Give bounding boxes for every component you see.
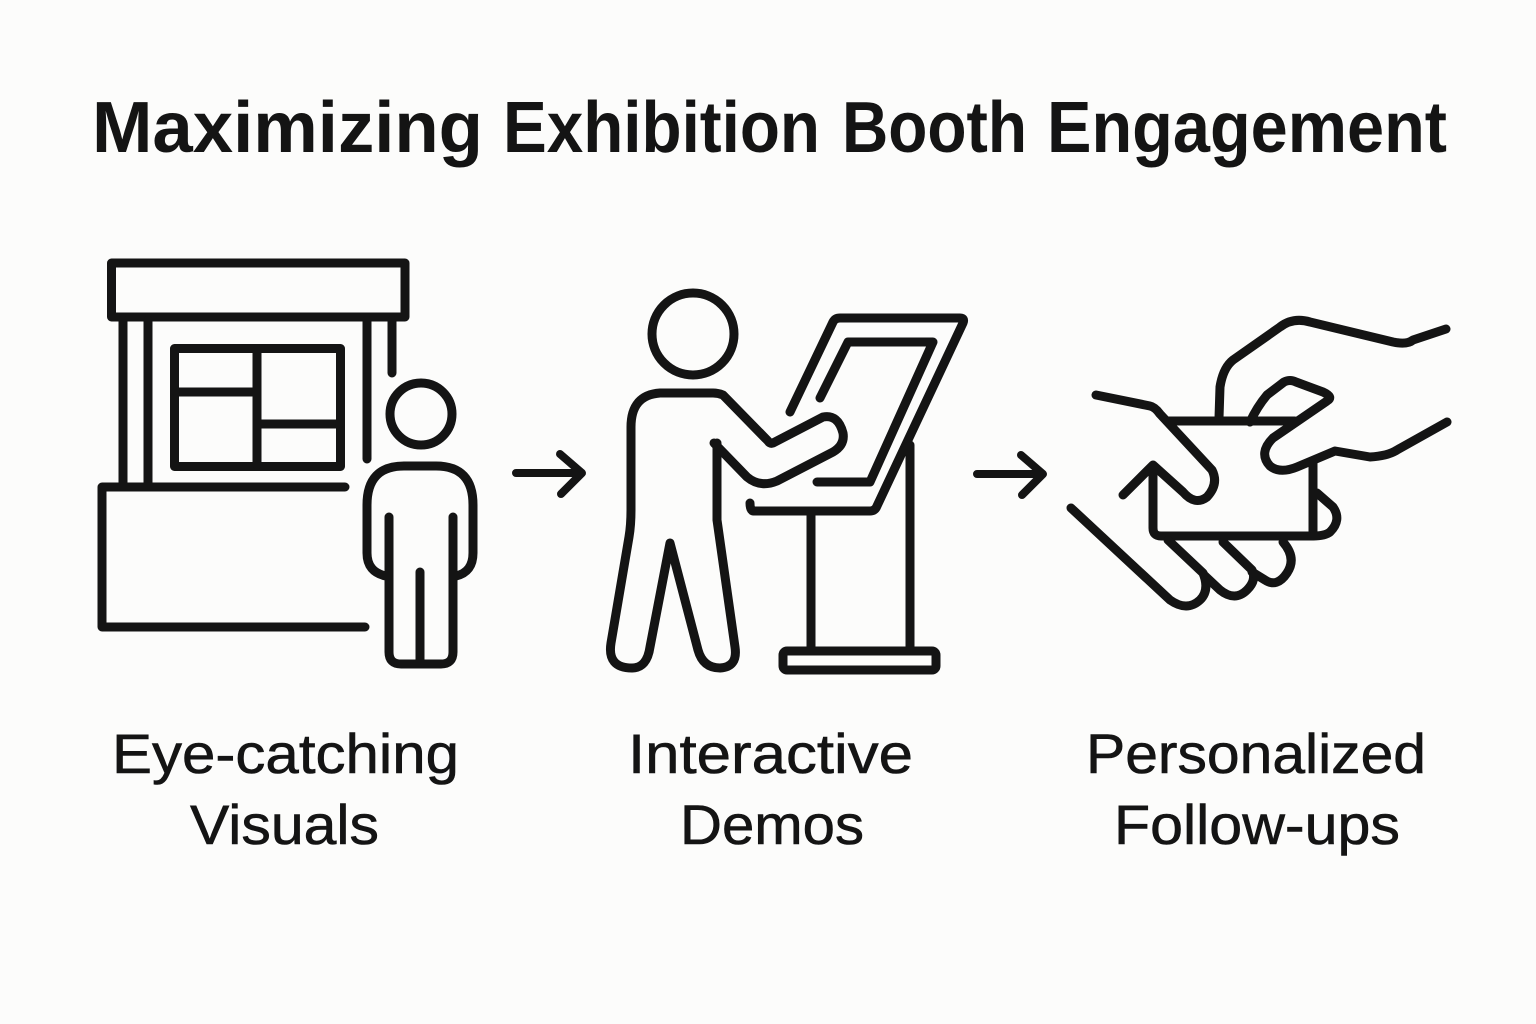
label: personalized follow-ups: [1086, 722, 1426, 856]
label: eye-catching visuals: Visuals: [190, 793, 379, 856]
title: Booth: [842, 88, 1027, 168]
arrow 1: [516, 454, 582, 494]
label: interactive demos: [628, 722, 913, 856]
icon: hands exchanging business card: [1071, 320, 1447, 606]
title: Maximizing: [92, 88, 483, 168]
title: Engagement: [1047, 88, 1447, 168]
label: interactive demos: Interactive: [628, 722, 913, 785]
label: interactive demos: Demos: [680, 793, 864, 856]
title: [92, 88, 1447, 168]
label: personalized follow-ups: Personalized: [1086, 722, 1426, 785]
label: personalized follow-ups: Follow-ups: [1114, 793, 1400, 856]
label: eye-catching visuals: [112, 722, 459, 856]
icon: exhibition booth with visitor: [102, 263, 473, 664]
icon: person using interactive kiosk: [610, 293, 964, 670]
title: Exhibition: [503, 88, 820, 168]
arrow 2: [977, 455, 1043, 495]
label: eye-catching visuals: Eye-catching: [112, 722, 459, 785]
